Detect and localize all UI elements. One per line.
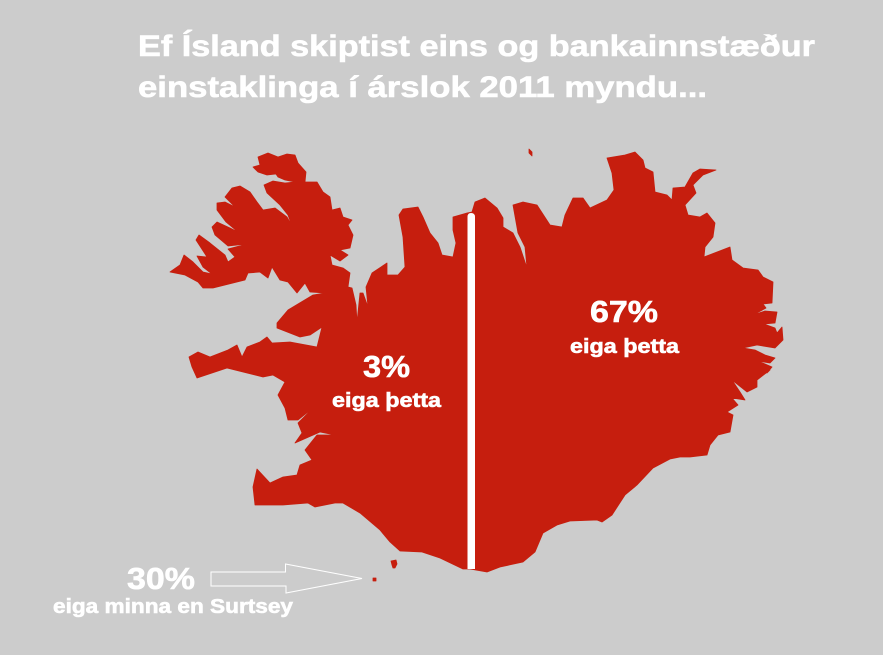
arrow to Surtsey <box>211 564 362 593</box>
island: Heimaey <box>391 560 397 568</box>
map of Iceland <box>170 149 783 581</box>
island: Surtsey <box>373 578 376 581</box>
label: 3 percent: 3% <box>363 349 410 384</box>
label: 30 percent: 30% <box>127 561 195 596</box>
label: 67 percent: eiga þetta <box>570 336 680 358</box>
dividing line <box>468 213 475 569</box>
island: Grímsey <box>529 149 532 156</box>
title <box>138 29 815 104</box>
label: 30 percent: eiga minna en Surtsey <box>53 596 294 618</box>
label: 3 percent <box>332 349 442 412</box>
title: einstaklinga í árslok 2011 myndu... <box>138 71 707 104</box>
label: 67 percent: 67% <box>590 294 658 329</box>
label: 67 percent <box>570 294 680 358</box>
label: 3 percent: eiga þetta <box>332 390 442 412</box>
title: Ef Ísland skiptist eins og bankainnstæður <box>138 29 815 63</box>
label: 30 percent <box>53 561 294 618</box>
